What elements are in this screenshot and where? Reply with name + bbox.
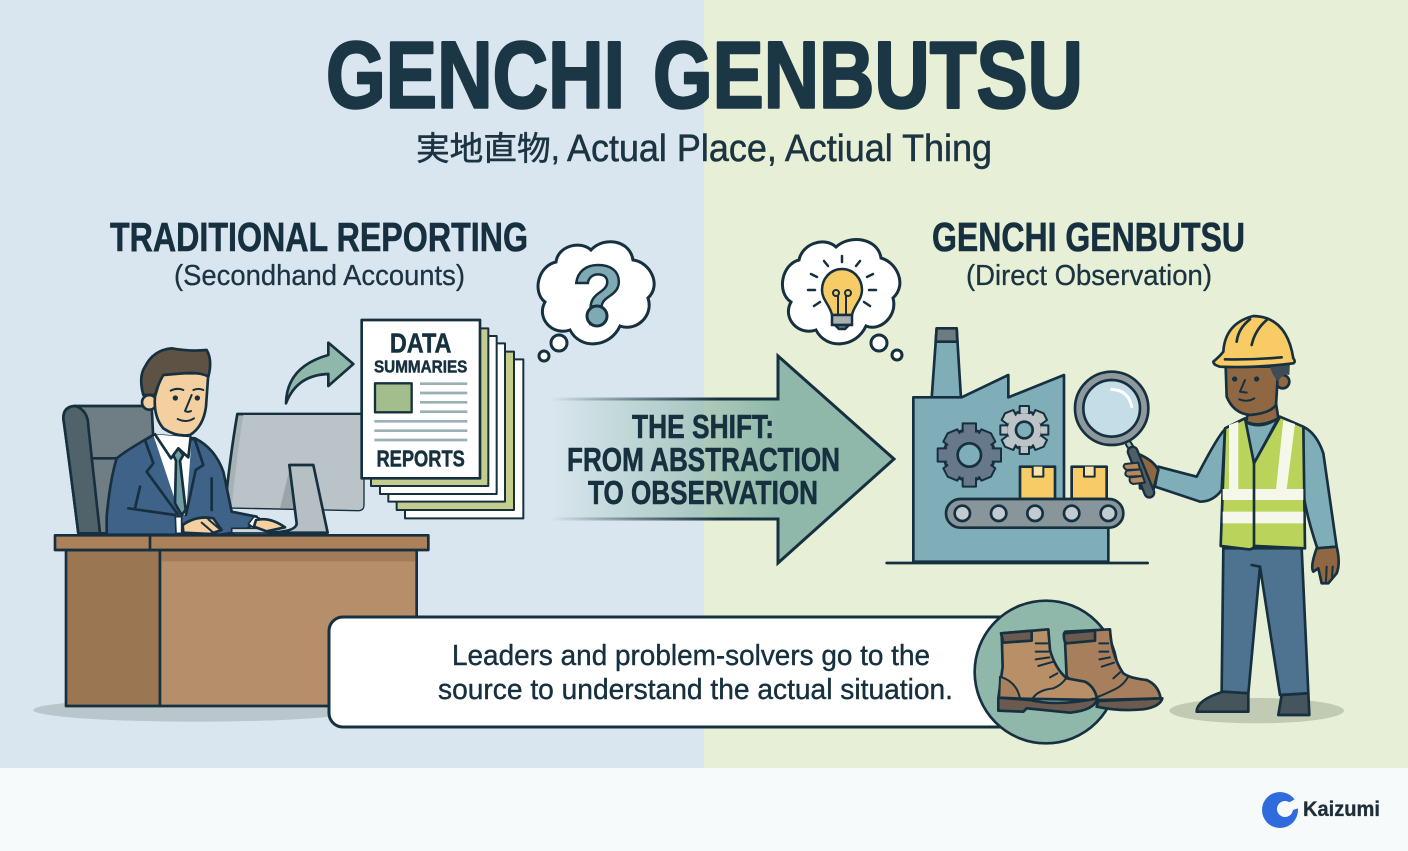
shirt	[153, 435, 192, 515]
footer band	[0, 768, 1408, 851]
icon: logo mark	[1262, 792, 1299, 828]
factory building	[887, 328, 1148, 563]
icon: question mark: ?	[572, 248, 624, 342]
document stack: SUMMARIES	[374, 357, 467, 377]
desk shadow	[33, 698, 360, 722]
collar and lapels	[155, 434, 191, 458]
businessman	[107, 348, 285, 535]
shirt	[1245, 418, 1278, 463]
chair	[63, 406, 153, 533]
callout: source to understand the actual situation.	[438, 674, 953, 706]
thought bubble: idea	[782, 239, 902, 360]
arrow label: THE SHIFT:	[632, 408, 774, 445]
arrow label: TO OBSERVATION	[588, 474, 818, 511]
heading: traditional reporting: TRADITIONAL REPORTING	[110, 214, 528, 260]
logo: Kaizumi: Kaizumi	[1303, 798, 1380, 821]
arrow label	[567, 408, 840, 511]
icon: light bulb	[808, 256, 876, 329]
document stack: REPORTS	[376, 446, 465, 472]
logo: Kaizumi	[1262, 792, 1380, 828]
title: GENCHI	[326, 22, 625, 128]
head	[1226, 363, 1290, 415]
neck	[1246, 403, 1278, 424]
free hand	[1312, 547, 1339, 583]
callout	[329, 617, 1019, 727]
background: genchi side	[704, 0, 1408, 768]
background: traditional side	[0, 0, 704, 768]
subtitle: 実地直物,	[416, 130, 560, 167]
heading: genchi genbutsu: GENCHI GENBUTSU	[932, 214, 1245, 260]
document stack: DATA	[390, 328, 451, 359]
title: GENBUTSU	[653, 22, 1083, 128]
illustration: factory	[887, 328, 1344, 723]
icon: boots	[975, 601, 1162, 743]
boxes	[1020, 467, 1107, 499]
subtitle: Actual Place, Actiual Thing	[567, 128, 992, 170]
document stack	[362, 320, 523, 518]
worker upper body with magnifying glass	[1075, 316, 1339, 583]
arrow: the shift	[550, 356, 894, 563]
sleeves	[1303, 427, 1337, 548]
tie	[173, 448, 186, 515]
hard hat	[1213, 316, 1295, 367]
title	[326, 22, 1083, 128]
magnifying glass	[1075, 372, 1158, 493]
arrow label: FROM ABSTRACTION	[567, 441, 840, 478]
icon: large gear	[938, 423, 1001, 487]
desk	[55, 535, 428, 706]
heading: genchi genbutsu	[932, 214, 1245, 292]
conveyor belt	[946, 499, 1123, 528]
monitor	[225, 414, 363, 533]
heading: traditional reporting	[110, 214, 528, 292]
icon: small gear	[1000, 406, 1048, 454]
keyboard	[232, 528, 270, 533]
vest	[1221, 417, 1305, 549]
rear boot	[1064, 629, 1162, 710]
worker legs and shoes	[1197, 548, 1309, 715]
cuffs and hands	[175, 517, 182, 533]
curved arrow	[286, 343, 353, 403]
thought bubble: question	[538, 242, 654, 361]
worker shadow	[1169, 698, 1344, 723]
front boot	[998, 629, 1097, 713]
suit	[107, 435, 257, 535]
callout: Leaders and problem-solvers go to the	[452, 640, 930, 672]
heading: traditional reporting: (Secondhand Accounts)	[174, 260, 465, 292]
head	[141, 348, 210, 435]
heading: genchi genbutsu: (Direct Observation)	[966, 260, 1212, 292]
illustration: desk, chair, monitor, documents	[33, 320, 523, 722]
